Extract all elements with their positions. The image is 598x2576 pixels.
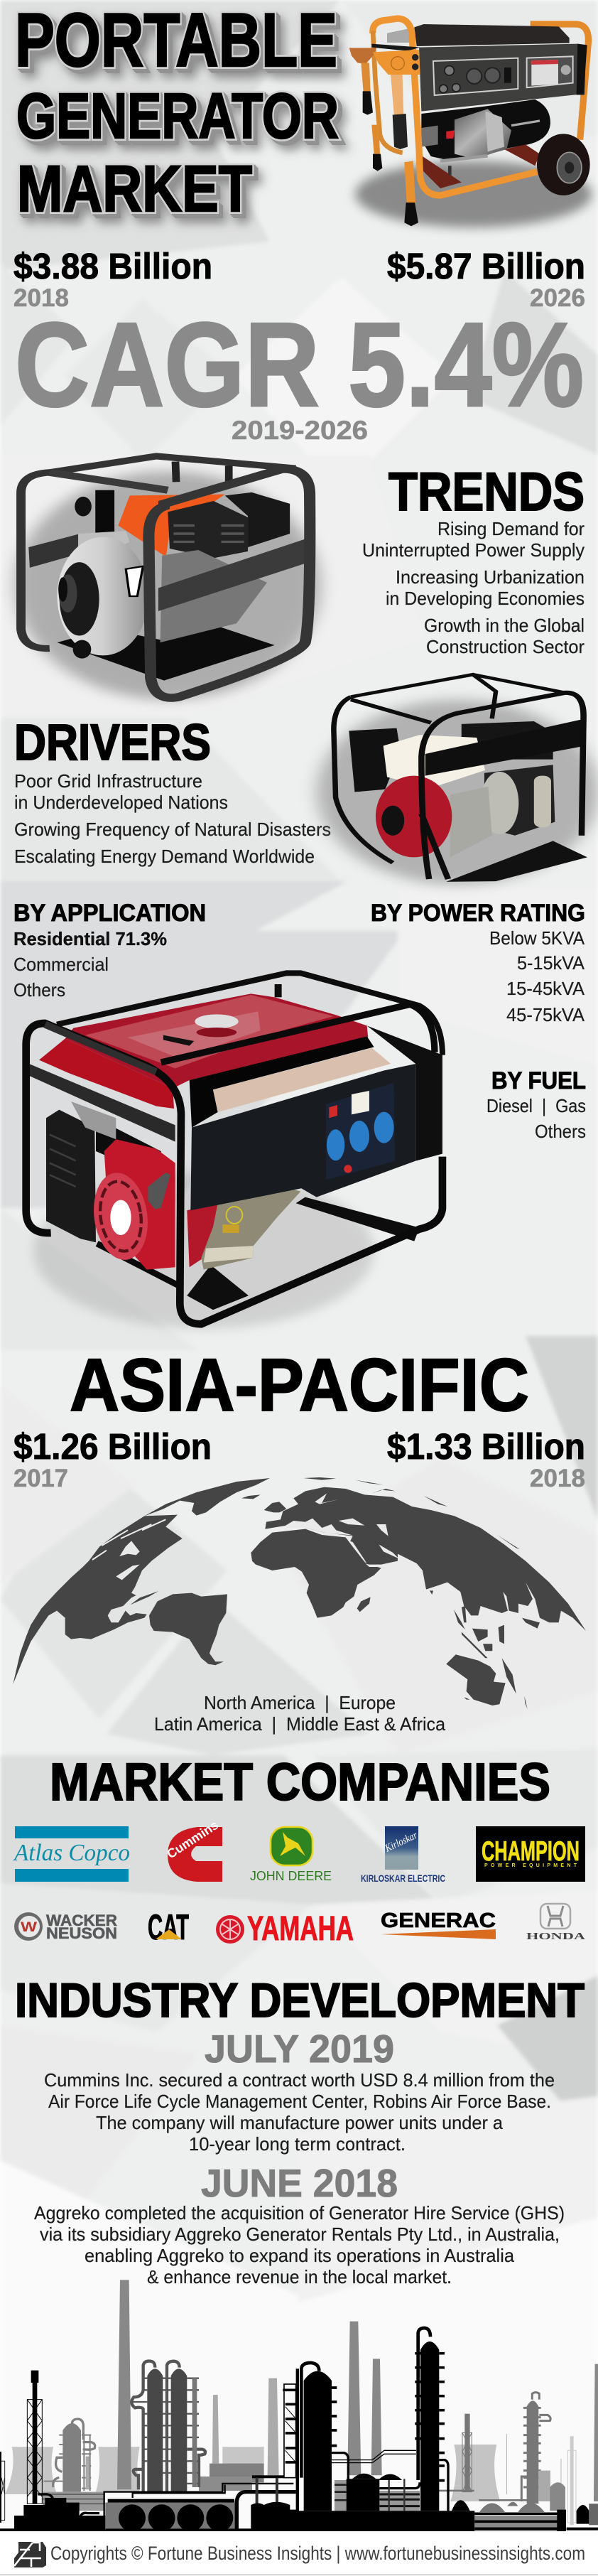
- logo: Champion: [476, 1826, 585, 1882]
- logo: Yamaha: [216, 1910, 354, 1948]
- development: July 2019: JULY 2019: [205, 2027, 394, 2071]
- logo: Kirloskar Electric: Kirloskar: [383, 1830, 419, 1855]
- section: trends: [362, 462, 585, 657]
- logo: John Deere: [250, 1827, 332, 1883]
- section: drivers: in Underdeveloped Nations: [14, 792, 228, 813]
- segment: by power rating: 45-75kVA: [506, 1004, 585, 1025]
- logo: Wacker Neuson: W: [21, 1920, 37, 1935]
- stat: Asia-Pacific 2018: 2018: [530, 1465, 585, 1492]
- development: June 2018: Aggreko completed the acquisition of Generator Hire Service (GHS): [34, 2202, 565, 2224]
- stat: 2018 market size: 2018: [13, 284, 69, 312]
- section: trends: Increasing Urbanization: [396, 566, 585, 588]
- icon: pump generator with red engine: [317, 674, 598, 885]
- title: MARKET: [17, 153, 252, 225]
- logo: Kirloskar Electric: [361, 1826, 445, 1884]
- title: GENERATOR: [16, 81, 339, 152]
- regions list: [154, 1692, 446, 1735]
- stat: 2026 market size: $5.87 Billion: [387, 246, 585, 286]
- heading: market companies: MARKET COMPANIES: [50, 1752, 550, 1811]
- icon: large red generator: [26, 973, 442, 1329]
- segment: by power rating: Below 5KVA: [489, 927, 585, 949]
- footer: [0, 2531, 598, 2576]
- section: drivers: Growing Frequency of Natural Disasters: [14, 819, 331, 840]
- logo: CAT: [148, 1907, 189, 1947]
- logo: Generac: [381, 1909, 496, 1939]
- development: July 2019: Air Force Life Cycle Management Center, Robins Air Force Base.: [48, 2091, 551, 2112]
- stat: 2026 market size: 2026: [530, 284, 585, 312]
- segment: by application: Commercial: [13, 954, 109, 975]
- logo: Yamaha: YAMAHA: [247, 1910, 354, 1948]
- title: MARKET: [17, 153, 252, 225]
- stat: Asia-Pacific 2018: [387, 1426, 585, 1492]
- segment: by fuel: Others: [535, 1121, 586, 1142]
- section: drivers: Poor Grid Infrastructure: [14, 770, 202, 792]
- stat: Asia-Pacific 2018: $1.33 Billion: [387, 1426, 585, 1467]
- segment: by power rating: 5-15kVA: [517, 952, 585, 974]
- industrial skyline: [0, 2280, 598, 2532]
- logo: Wacker Neuson: WACKER: [46, 1912, 117, 1929]
- segment: by application: BY APPLICATION: [13, 900, 206, 927]
- segment: by application: Residential 71.3%: [13, 928, 167, 949]
- section: drivers: [14, 715, 331, 867]
- development: July 2019: [44, 2027, 555, 2155]
- development: June 2018: [34, 2161, 565, 2287]
- logo: Wacker Neuson: NEUSON: [46, 1924, 117, 1942]
- section: trends: Rising Demand for: [437, 518, 585, 539]
- stat: 2026 market size: [387, 246, 585, 312]
- development: July 2019: Cummins Inc. secured a contract worth USD 8.4 million from the: [44, 2069, 555, 2091]
- segment: by application: [13, 900, 206, 1001]
- segment: by power rating: [371, 900, 585, 1025]
- section: drivers: DRIVERS: [14, 715, 211, 771]
- title: [15, 0, 339, 225]
- section: trends: Construction Sector: [426, 636, 585, 657]
- logo: John Deere: JOHN DEERE: [250, 1869, 332, 1883]
- segment: by fuel: [486, 1067, 586, 1142]
- development: June 2018: JUNE 2018: [201, 2161, 398, 2205]
- logo: Atlas Copco: [13, 1826, 130, 1882]
- logo: Wacker Neuson: [14, 1912, 117, 1942]
- stat: Asia-Pacific 2017: $1.26 Billion: [13, 1426, 212, 1467]
- development: June 2018: & enhance revenue in the local market.: [147, 2266, 452, 2287]
- world map: [13, 1477, 586, 1709]
- stat: Asia-Pacific 2017: [13, 1426, 212, 1492]
- icon: pump generator with orange tank: [15, 456, 320, 699]
- development: July 2019: 10-year long term contract.: [189, 2133, 406, 2155]
- section: trends: in Developing Economies: [386, 588, 585, 609]
- logo: CAT: CAT: [148, 1907, 189, 1947]
- logo: Champion: POWER EQUIPMENT: [484, 1863, 577, 1868]
- section: drivers: Escalating Energy Demand Worldwide: [14, 846, 315, 867]
- segment: by application: Others: [13, 979, 65, 1001]
- logo: Kirloskar Electric: KIRLOSKAR ELECTRIC: [361, 1872, 445, 1884]
- logo: Honda: [526, 1904, 586, 1942]
- heading: Asia-Pacific: ASIA-PACIFIC: [70, 1344, 529, 1427]
- section: trends: Growth in the Global: [424, 615, 585, 636]
- stat: 2018 market size: $3.88 Billion: [13, 246, 212, 286]
- logo: Honda: HONDA: [526, 1931, 586, 1942]
- regions list: North America | Europe: [204, 1692, 396, 1713]
- segment: by fuel: BY FUEL: [491, 1067, 586, 1094]
- stat: 2018 market size: [13, 246, 212, 312]
- development: June 2018: enabling Aggreko to expand its operations in Australia: [85, 2245, 515, 2266]
- title: GENERATOR: [16, 81, 339, 152]
- development: July 2019: The company will manufacture power units under a: [96, 2112, 504, 2133]
- logo: Cummins: [164, 1818, 222, 1882]
- stat: Asia-Pacific 2017: 2017: [13, 1465, 68, 1492]
- logo: Atlas Copco: Atlas Copco: [13, 1840, 130, 1866]
- section: trends: Uninterrupted Power Supply: [362, 539, 585, 561]
- logo: Cummins: Cummins: [164, 1818, 221, 1861]
- segment: by fuel: Diesel | Gas: [486, 1095, 586, 1116]
- logo: Generac: GENERAC: [381, 1909, 496, 1932]
- development: June 2018: via its subsidiary Aggreko Generator Rentals Pty Ltd., in Australia,: [40, 2224, 560, 2245]
- segment: by power rating: 15-45kVA: [506, 978, 585, 999]
- segment: by power rating: BY POWER RATING: [371, 900, 585, 927]
- icon: orange portable generator: [349, 18, 592, 227]
- icon: Fortune Business Insights logo: [14, 2542, 46, 2567]
- stat: CAGR: 2019-2026: [232, 416, 368, 445]
- regions list: Latin America | Middle East & Africa: [154, 1713, 446, 1735]
